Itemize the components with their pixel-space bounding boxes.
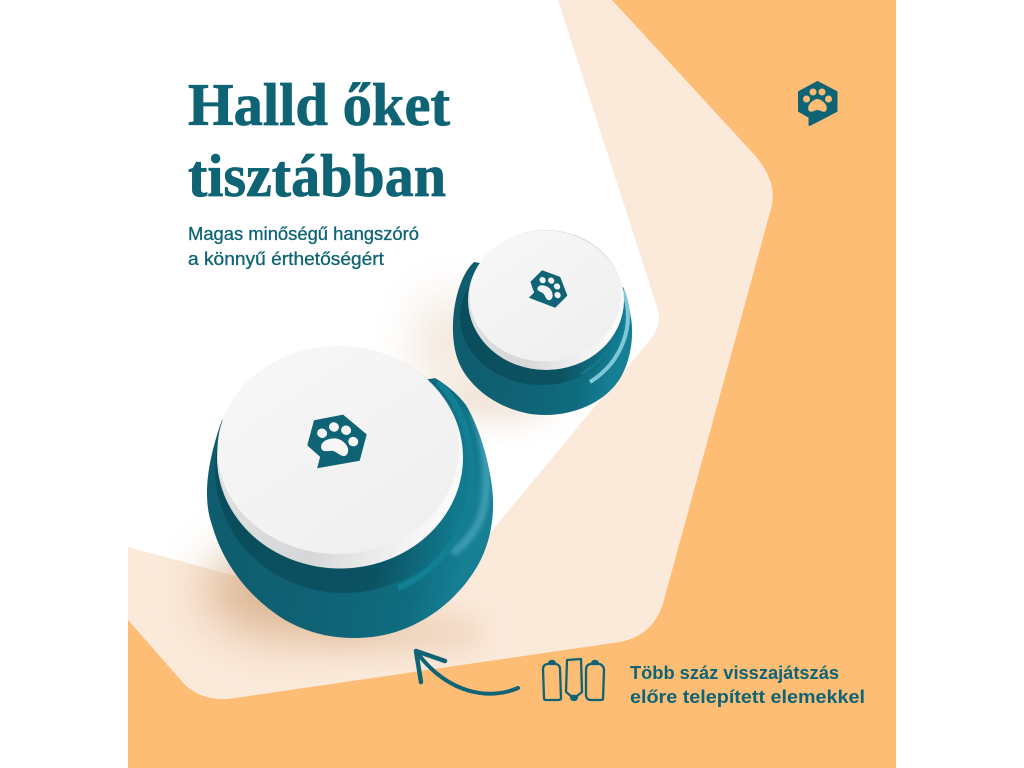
large button cap (217, 346, 463, 568)
beige panel (128, 0, 773, 699)
title: tisztábban (188, 143, 446, 209)
small button cap (468, 230, 624, 370)
small button rim (460, 285, 630, 385)
title: Halld őket (188, 72, 450, 138)
large button rim (215, 378, 472, 593)
subtitle: a könnyű érthetőségért (188, 249, 384, 269)
batteries caption: előre telepített elemekkel (630, 687, 865, 707)
arrow pointing to the button (416, 651, 518, 694)
icon: batteries (543, 659, 604, 700)
small speaker button (453, 230, 632, 415)
icon: brand logo top right (799, 82, 836, 125)
infographic canvas (128, 0, 896, 768)
icon: large paw logo (307, 414, 367, 468)
icon: small paw logo (529, 270, 568, 308)
batteries caption: Több száz visszajátszás (630, 663, 839, 683)
soft shadows (205, 295, 555, 652)
small button body (453, 262, 632, 415)
large speaker button (207, 346, 493, 638)
large button body (207, 378, 493, 638)
large button highlight (452, 412, 487, 553)
subtitle: Magas minőségű hangszóró (188, 224, 419, 244)
orange background (128, 0, 896, 768)
white panel (128, 0, 659, 620)
